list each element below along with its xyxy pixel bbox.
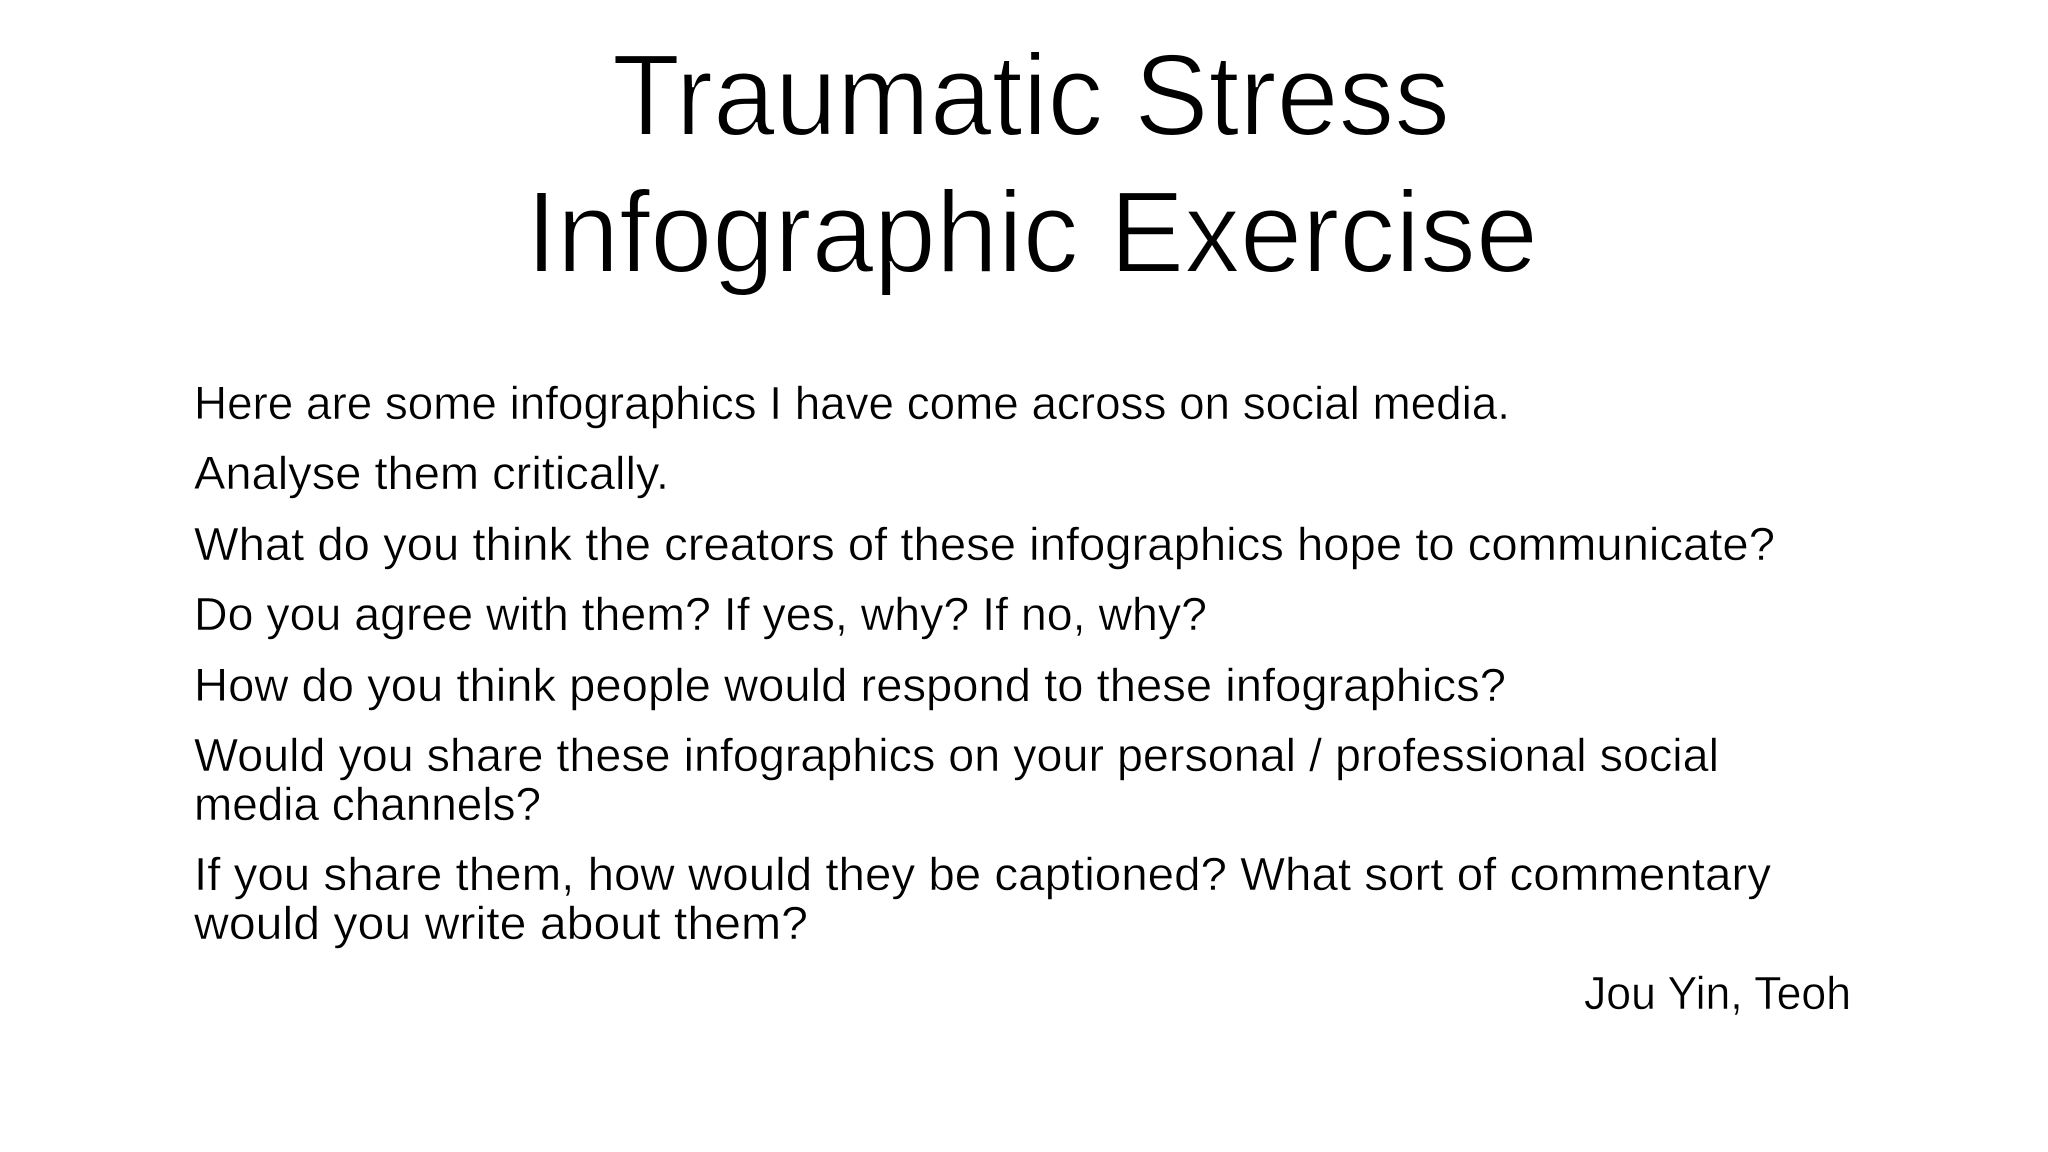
prompt 4: Do you agree with them? If yes, why? If no, why?: [194, 588, 1207, 640]
prompt 2: Analyse them critically.: [194, 447, 669, 499]
title: Infographic Exercise: [526, 167, 1538, 297]
prompt 6: Would you share these infographics on your personal / professional social: [194, 729, 1719, 781]
body text: prompts: [193, 377, 1775, 949]
prompt 5: How do you think people would respond to these infographics?: [194, 659, 1506, 711]
prompt 6: [194, 729, 1719, 830]
prompt 6: media channels?: [194, 778, 541, 830]
title: Traumatic Stress: [612, 30, 1450, 160]
prompt 1: Here are some infographics I have come across on social media.: [194, 377, 1510, 429]
prompt 7: If you share them, how would they be captioned? What sort of commentary: [194, 848, 1771, 900]
author credit: Jou Yin, Teoh: [1584, 967, 1851, 1019]
title: [526, 30, 1538, 297]
prompt 3: What do you think the creators of these infographics hope to communicate?: [194, 518, 1775, 570]
prompt 7: would you write about them?: [193, 897, 808, 949]
prompt 7: [193, 848, 1771, 949]
